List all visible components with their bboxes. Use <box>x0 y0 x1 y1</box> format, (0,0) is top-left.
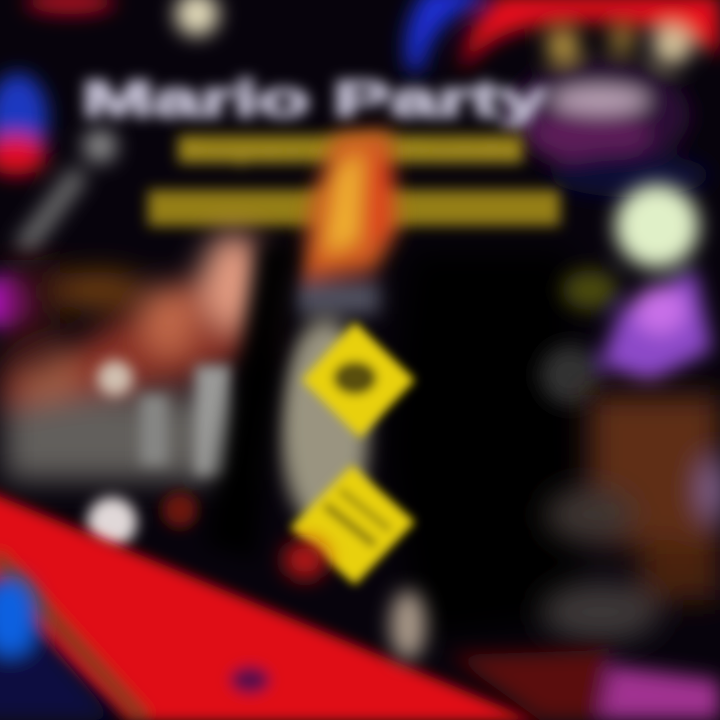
dark vertical pole <box>205 240 295 560</box>
central black panel <box>385 250 585 640</box>
bottom red ribbon <box>0 488 540 720</box>
right icons <box>540 184 712 405</box>
left details <box>87 360 233 547</box>
yellow badge top <box>302 322 415 438</box>
subtitle lines <box>148 135 560 226</box>
central character <box>280 130 398 530</box>
left bars group <box>0 232 262 480</box>
bottom details <box>283 540 720 720</box>
bottom left blue corner <box>0 575 115 720</box>
subtitle lines: Superstar Guide <box>178 136 523 166</box>
left planet icon <box>0 73 117 328</box>
top right character <box>412 0 720 197</box>
top left accents <box>25 0 219 36</box>
title: Mario Party <box>82 71 547 127</box>
right brown panels <box>540 395 720 642</box>
yellow badge bottom <box>290 465 415 585</box>
